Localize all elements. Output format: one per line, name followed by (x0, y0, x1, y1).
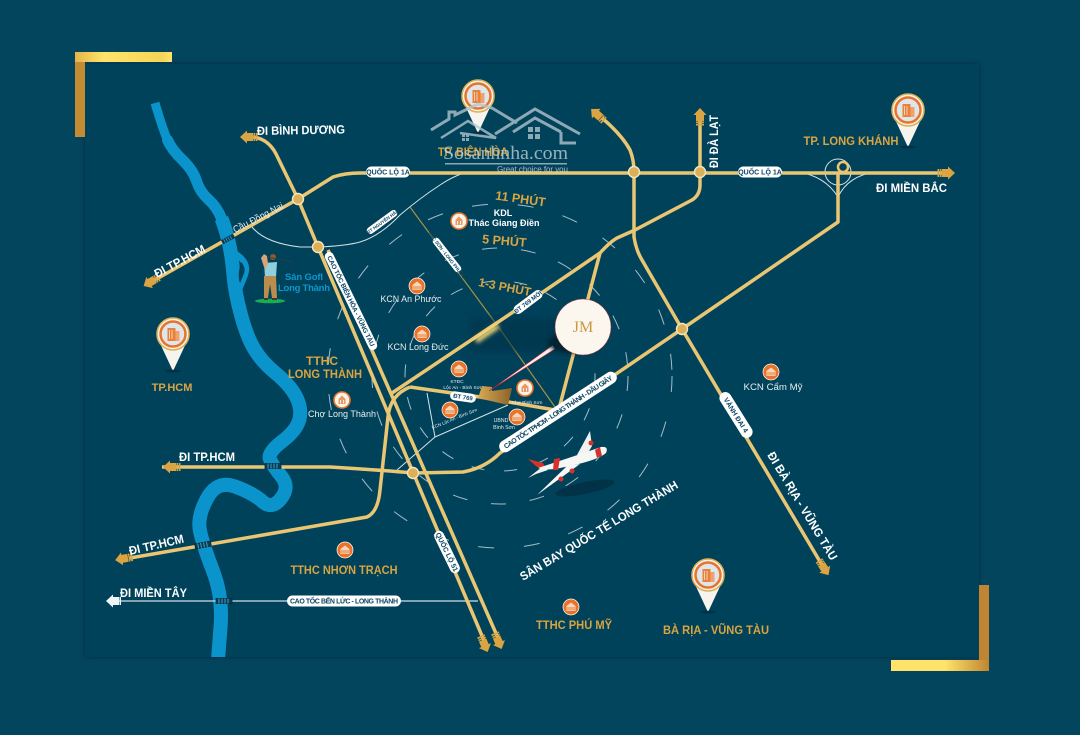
place labels: Chợ Bình Sơn (512, 400, 543, 406)
golfer figure (255, 254, 293, 303)
road labels: ĐT 769 MỚI (512, 289, 544, 315)
golf course label: Long Thành (278, 283, 330, 294)
gold place names: TTHC (306, 354, 338, 368)
gold corner bottom right (891, 585, 989, 671)
direction labels: SÂN BAY QUỐC TẾ LONG THÀNH (517, 477, 681, 584)
bridge label: Cầu Đồng Nai (231, 201, 285, 236)
direction labels: ĐI TP.HCM (152, 242, 208, 281)
watermark slogan: Great choice for you (497, 165, 568, 174)
travel-time labels (477, 188, 547, 299)
map pins (157, 80, 924, 614)
project logo bubble (548, 299, 611, 355)
road arrows (106, 104, 955, 655)
road labels (287, 166, 782, 606)
right house wall (561, 132, 576, 143)
road junction nodes (292, 166, 706, 478)
lower roof (441, 121, 496, 138)
golf course label: Sân Gofl (285, 272, 323, 283)
gold place names: BÀ RỊA - VŨNG TÀU (663, 622, 769, 637)
place labels: KTĐC (450, 379, 464, 385)
place labels: KCN Long Đức (388, 342, 449, 353)
road labels: VÀNH ĐAI 4 (722, 396, 750, 434)
road highlight (476, 326, 498, 341)
golf course label (278, 272, 330, 294)
main roads (130, 118, 943, 643)
place labels: KCN Cẩm Mỹ (744, 382, 803, 393)
right house roof (495, 109, 580, 134)
travel-time labels: 11 PHÚT (494, 188, 547, 210)
Ben Luc expressway line (118, 600, 478, 602)
travel-time labels: 1-3 PHÚT (477, 274, 533, 299)
place labels: Lộc An - Bình Sơn (443, 385, 483, 391)
place labels: UBND (494, 418, 509, 424)
airplane (528, 431, 616, 500)
gold place names: TTHC NHƠN TRẠCH (290, 563, 398, 577)
place labels (308, 208, 803, 431)
direction labels: ĐI ĐÀ LẠT (706, 114, 721, 168)
road labels: ĐT 769 (453, 394, 474, 403)
dashed travel-time rings (328, 204, 672, 548)
panel shadow (85, 64, 979, 657)
direction labels: ĐI TP.HCM (128, 532, 185, 558)
gold place names: LONG THÀNH (288, 366, 362, 381)
place labels: Chợ Long Thành (308, 409, 376, 420)
gold place names: TP. BIÊN HÒA (438, 144, 508, 159)
place labels: KCN An Phước (380, 294, 442, 305)
project logo bubble: JM (573, 319, 593, 336)
road labels: QUỐC LỘ 1A (366, 166, 410, 176)
left house roof (431, 104, 517, 130)
watermark rule (445, 163, 567, 164)
river (155, 103, 300, 660)
place labels: KDL (494, 208, 513, 218)
infographic map (75, 52, 989, 671)
road labels: CAO TỐC BIÊN HÒA - VŨNG TÀU (325, 254, 378, 348)
place labels: KCN Lộc An - Bình Sơn (431, 407, 478, 430)
road labels: ĐT NGUYỄN HẢI (365, 209, 398, 235)
direction labels: ĐI MIỀN BẮC (876, 180, 947, 195)
project plot (478, 386, 512, 405)
road labels: QUỐC LỘ 1A (738, 166, 782, 176)
house windows (462, 127, 540, 141)
direction labels: ĐI MIỀN TÂY (120, 585, 187, 600)
direction labels: ĐI TP.HCM (179, 450, 235, 464)
thin local roads (252, 159, 875, 470)
gold place names (152, 133, 898, 637)
gold place names: TTHC PHÚ MỸ (536, 617, 612, 632)
olive diagonal road (410, 207, 555, 407)
place labels: Bình Sơn (493, 425, 515, 431)
direction labels: ĐI BÌNH DƯƠNG (257, 121, 345, 138)
direction labels: ĐI BÀ RỊA - VŨNG TÀU (764, 449, 841, 563)
gold corner top left (75, 52, 172, 137)
travel-time labels: 5 PHÚT (482, 231, 528, 250)
project pointer line (489, 345, 555, 391)
place icons (334, 213, 779, 615)
gold place names: TP.HCM (152, 382, 192, 394)
road labels: BẮC SƠN - LONG PHƯỚC (427, 230, 468, 280)
road labels: CAO TỐC BẾN LỨC - LONG THÀNH (290, 595, 398, 605)
dark shading around project (470, 318, 600, 352)
bridges (195, 234, 281, 604)
road labels: QUỐC LỘ 51 (434, 530, 461, 573)
direction labels (120, 114, 947, 600)
gold place names: TP. LONG KHÁNH (804, 133, 898, 148)
map panel (85, 64, 979, 657)
road labels: CAO TỐC TPHCM - LONG THÀNH - DẦU GIÂY (501, 372, 614, 451)
watermark name: Sosanhnha.com (443, 143, 568, 164)
watermark (431, 104, 580, 174)
place labels: Thác Giang Điền (468, 218, 540, 228)
